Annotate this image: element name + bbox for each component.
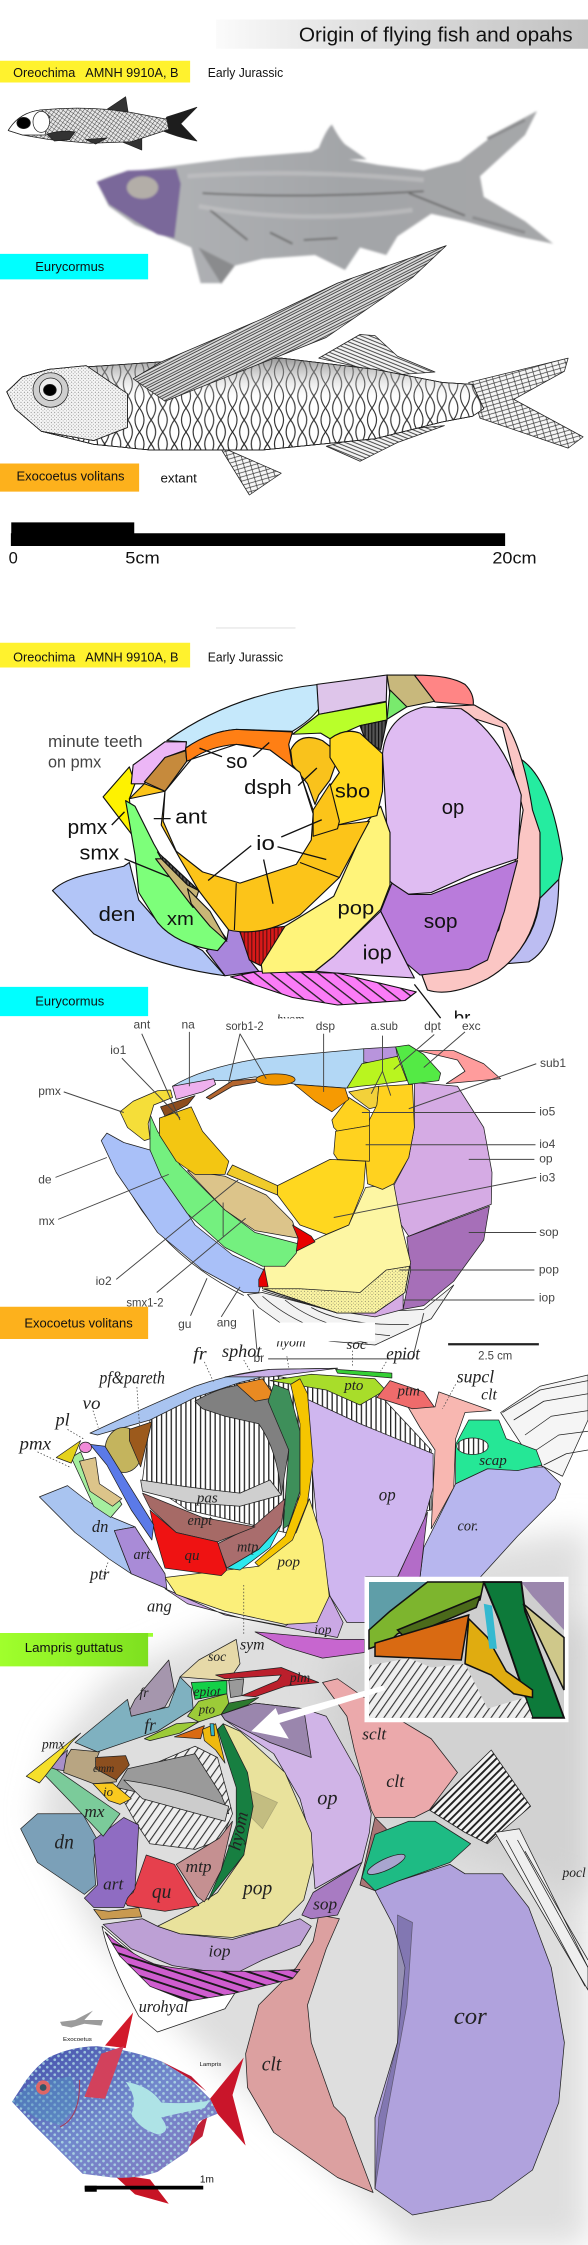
text: Early Jurassic: Early Jurassic	[208, 65, 284, 80]
italic bone labels: cor	[454, 2003, 487, 2030]
clip strip above the cropped labels	[262, 1322, 375, 1341]
italic bone labels: supcl	[457, 1367, 494, 1387]
italic bone labels: pas	[196, 1490, 218, 1507]
scale bar: 0 to 20 cm: 0	[9, 549, 18, 567]
italic bone labels: hyom	[224, 1810, 252, 1852]
italic bone labels: dn	[54, 1832, 74, 1853]
bone labels: sub1	[540, 1056, 566, 1070]
diagram: Oreochima skull bones	[52, 675, 562, 1005]
label: Exocoetus volitans: Exocoetus volitans	[16, 468, 125, 483]
italic bone labels: clt	[481, 1386, 497, 1403]
section: Lampris	[0, 1577, 588, 2215]
italic bone labels: pop	[277, 1554, 301, 1570]
bone labels: br	[254, 1351, 264, 1365]
bone labels	[68, 751, 464, 964]
label: Oreochima: Oreochima AMNH 9910A, B	[13, 65, 179, 80]
italic bone labels: mx	[84, 1802, 105, 1821]
bone labels: a.sub	[370, 1019, 398, 1033]
italic bone labels: ang	[147, 1596, 172, 1615]
italic bone labels: qu	[152, 1882, 172, 1903]
scale bar: 2.5 cm: 2.5 cm	[478, 1348, 512, 1362]
italic bone labels: plm	[289, 1670, 310, 1685]
italic bone labels: pmx	[41, 1736, 65, 1752]
scale bar: 1 m: 1m	[200, 2174, 214, 2185]
label: Exocoetus volitans	[0, 464, 139, 492]
leader lines	[112, 742, 441, 1018]
label: Eurycormus	[0, 987, 148, 1016]
bone labels: sop	[424, 911, 458, 933]
caption: Exocoetus: Exocoetus	[63, 2037, 92, 2043]
bone labels: na	[182, 1018, 195, 1032]
label: Oreochima	[0, 643, 190, 668]
bone labels: de	[38, 1172, 52, 1186]
scale bar: 0 to 20 cm	[9, 522, 537, 567]
italic bone labels: cor.	[458, 1519, 478, 1535]
bone labels: io3	[539, 1171, 556, 1185]
italic bone labels: soc	[346, 1337, 367, 1353]
italic bone labels: scap	[479, 1453, 507, 1469]
italic bone labels: mtp	[237, 1539, 258, 1555]
faint bar	[216, 627, 296, 629]
bone labels	[38, 1018, 566, 1365]
bone labels: ant	[175, 807, 207, 829]
bone labels: smx	[80, 843, 119, 865]
italic bone labels: qu	[184, 1548, 200, 1564]
illustration: Exocoetus flying fish	[7, 246, 583, 495]
bone labels: io5	[539, 1105, 556, 1119]
italic bone labels: iop	[208, 1941, 231, 1960]
italic bone labels: pmx	[17, 1433, 51, 1453]
label: Oreochima	[0, 61, 190, 82]
italic bone labels: sphot	[222, 1341, 262, 1361]
icon: small flying fish silhouette	[60, 2011, 103, 2028]
italic bone labels: urohyal	[139, 1997, 189, 2016]
bone labels: dsp	[316, 1019, 335, 1033]
background: grey Lampris photo wash	[38, 1529, 588, 2245]
italic bone labels: mtp	[186, 1857, 212, 1876]
italic bone labels: art	[103, 1874, 124, 1894]
bone labels: sorb1-2	[226, 1019, 264, 1033]
italic bone labels: fr	[140, 1685, 149, 1700]
italic bone labels	[17, 1334, 507, 1654]
section: full body fishes	[0, 20, 588, 567]
label: Exocoetus volitans: Exocoetus volitans	[24, 1315, 133, 1330]
italic bone labels: pf&pareth	[98, 1367, 165, 1387]
italic bone labels: ptr	[89, 1564, 110, 1583]
caption: Lampris: Lampris	[200, 2062, 221, 2068]
italic bone labels: sop	[313, 1894, 337, 1913]
italic bone labels: pocl	[562, 1865, 586, 1880]
bone labels: sop	[539, 1225, 559, 1239]
italic bone labels: op	[317, 1787, 338, 1809]
bone labels: io2	[96, 1274, 112, 1288]
text: Early Jurassic: Early Jurassic	[208, 650, 284, 664]
italic bone labels	[41, 1649, 586, 2076]
italic bone labels: vo	[82, 1393, 100, 1413]
diagram: Exocoetus skull bones	[39, 1368, 588, 1658]
italic bone labels: io	[103, 1785, 113, 1799]
text: minute teeth on pmx	[48, 732, 142, 772]
text: minute teeth on pmx: minute teeth	[48, 732, 142, 751]
label: Lampris guttatus: Lampris guttatus	[25, 1640, 123, 1655]
italic bone labels: fr	[193, 1343, 208, 1363]
bone labels: io1	[110, 1043, 127, 1057]
section: Oreochima skull	[0, 627, 588, 1033]
text: minute teeth on pmx: on pmx	[48, 753, 102, 772]
italic bone labels: pl	[53, 1410, 70, 1430]
bone labels: gu	[178, 1317, 191, 1331]
illustration: opah fish with size comparison	[12, 2012, 246, 2204]
italic bone labels: ptm	[397, 1384, 420, 1400]
diagram: Lampris skull and shoulder girdle	[21, 1639, 588, 2215]
scale bar: 1 m	[85, 2174, 214, 2192]
bone labels: den	[99, 904, 135, 926]
bone labels: iop	[363, 942, 392, 964]
bone labels: ang	[217, 1315, 237, 1329]
section: Eurycormus skull	[0, 987, 566, 1365]
clipped labels: hyom	[277, 1012, 304, 1026]
label: Lampris guttatus	[0, 1633, 153, 1666]
italic bone labels: dn	[92, 1517, 108, 1536]
bone labels: so	[226, 751, 248, 773]
italic bone labels: epiot	[386, 1343, 421, 1363]
italic bone labels: art	[134, 1547, 151, 1563]
bone labels: smx1-2	[126, 1295, 164, 1309]
bone labels: io	[256, 833, 275, 855]
label: Exocoetus volitans	[0, 1307, 148, 1339]
clipped labels: br	[454, 1007, 470, 1028]
italic bone labels: pto	[343, 1378, 364, 1394]
leader lines	[56, 1032, 536, 1359]
scale bar: 0 to 20 cm: 20cm	[492, 549, 537, 567]
clipped labels	[0, 1007, 588, 1033]
illustration: fossil Eurycormus fish	[97, 111, 553, 283]
scale bar: 2.5 cm	[448, 1343, 539, 1362]
scale bar: 0 to 20 cm: 5cm	[125, 549, 160, 567]
dotted leader lines	[38, 1351, 456, 1634]
label: Eurycormus: Eurycormus	[35, 994, 105, 1009]
bone labels: iop	[539, 1291, 555, 1305]
bone labels: op	[442, 797, 464, 819]
bone labels: dpt	[424, 1019, 441, 1033]
italic bone labels: clt	[386, 1771, 405, 1791]
label: Oreochima: Oreochima AMNH 9910A, B	[13, 650, 179, 664]
bone labels: pmx	[68, 817, 107, 839]
italic bone labels: enpt	[188, 1513, 213, 1529]
title bar: Origin of flying fish and opahs	[299, 23, 573, 46]
italic bone labels: clt	[262, 2055, 282, 2076]
text: extant: extant	[160, 470, 197, 485]
label: Eurycormus	[0, 254, 148, 279]
bone labels: pmx	[38, 1084, 61, 1098]
italic bone labels: sym	[240, 1637, 265, 1654]
italic bone labels: op	[379, 1485, 396, 1505]
italic bone labels: fr	[144, 1716, 156, 1735]
bone labels: dsph	[244, 777, 292, 799]
bone labels: op	[539, 1151, 553, 1165]
bone labels: ant	[134, 1018, 151, 1032]
diagram: Eurycormus skull bones	[101, 1045, 501, 1345]
italic bone labels: epiot	[194, 1684, 222, 1699]
italic bone labels: emm	[93, 1763, 114, 1775]
bone labels: xm	[167, 908, 194, 929]
bone labels: pop	[338, 897, 374, 919]
section: Exocoetus skull	[0, 1307, 588, 1658]
bone labels: exc	[462, 1019, 481, 1033]
italic bone labels: pop	[241, 1878, 273, 1899]
italic bone labels: iop	[314, 1622, 332, 1637]
bone labels: sbo	[335, 781, 370, 803]
italic bone labels: sclt	[362, 1724, 387, 1744]
italic bone labels: hyom	[276, 1334, 306, 1350]
title bar	[216, 20, 588, 49]
inset: zoomed view of skull detail	[364, 1577, 568, 1722]
bone labels: pop	[539, 1262, 559, 1276]
italic bone labels: soc	[208, 1649, 226, 1664]
bone labels: mx	[39, 1214, 55, 1228]
illustration: small Oreochima fish	[8, 97, 197, 150]
bone labels: io4	[539, 1137, 556, 1151]
italic bone labels: pto	[198, 1702, 215, 1716]
label: Eurycormus: Eurycormus	[35, 259, 105, 274]
arrow: points from inset to skull	[251, 1686, 386, 1739]
